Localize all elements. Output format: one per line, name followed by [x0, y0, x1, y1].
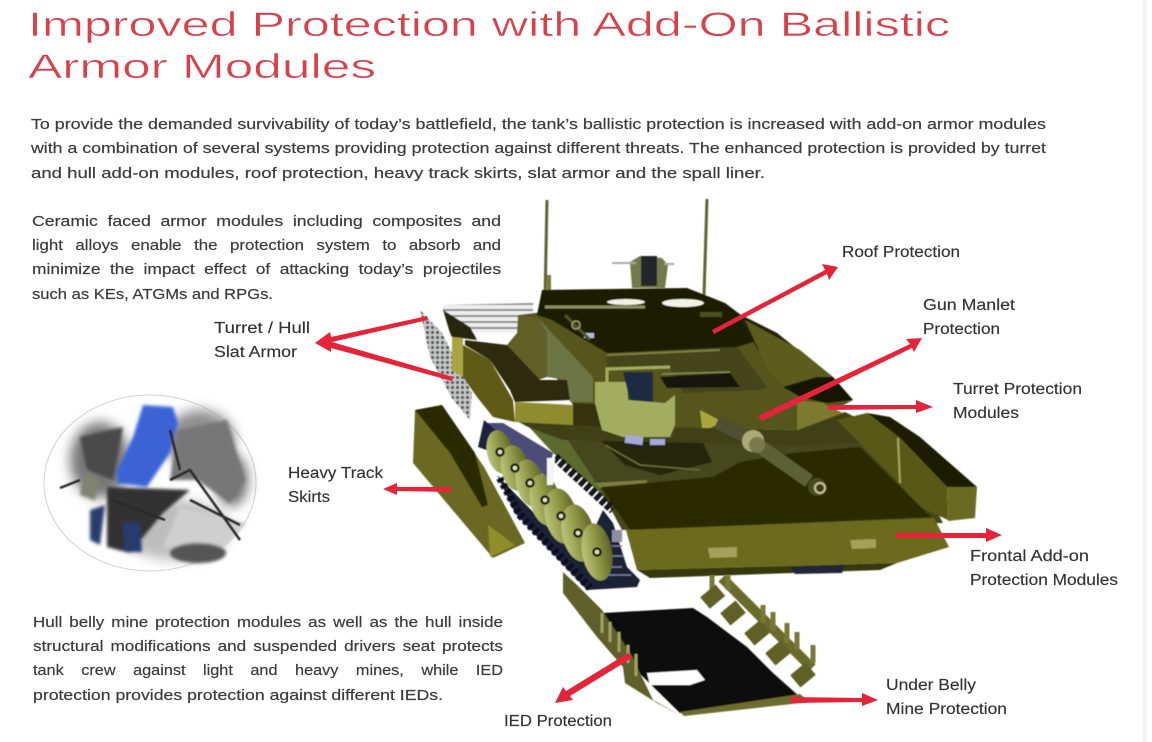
intro paragraph: with a combination of several systems providing protection against different threats. The enhanced protection is provided by turret — [30, 140, 1047, 157]
arrow: frontal add-on — [896, 528, 1002, 542]
lower track — [497, 475, 640, 590]
ceramic armor paragraph — [32, 213, 501, 303]
arrow: slat armor — [315, 316, 453, 381]
hull flank — [530, 428, 612, 505]
intro paragraph — [30, 116, 1047, 182]
antennas — [545, 199, 707, 300]
arrow: turret protection modules — [828, 400, 933, 413]
title — [28, 6, 950, 86]
intro paragraph: and hull add-on modules, roof protection, heavy track skirts, slat armor and the spall liner. — [31, 165, 765, 182]
ceramic armor paragraph: minimize the impact effect of attacking today’s projectiles — [32, 261, 501, 278]
turret front plate — [678, 390, 775, 425]
hull belly paragraph: tank crew against light and heavy mines, while IED — [33, 662, 503, 679]
gun barrel — [717, 422, 826, 496]
turret-hull junction — [515, 412, 900, 445]
periscopes — [625, 435, 665, 445]
title: Improved Protection with Add-On Ballistic — [28, 6, 950, 44]
label: frontal add-on protection modules: Frontal Add-on — [970, 548, 1089, 565]
arrow: under belly — [790, 693, 878, 706]
right hull side — [837, 413, 948, 520]
glacis plate — [601, 447, 933, 530]
label: turret hull slat armor: Slat Armor — [214, 344, 297, 361]
label: IED protection: IED Protection — [504, 713, 612, 730]
arrow: heavy track skirts — [383, 483, 451, 495]
right turret module — [737, 313, 853, 430]
label: under belly mine protection — [886, 677, 1007, 718]
commander sight — [612, 256, 674, 288]
label: under belly mine protection: Mine Protection — [886, 701, 1007, 718]
turret top recess — [607, 347, 767, 393]
label: gun manlet protection: Gun Manlet — [923, 297, 1016, 314]
hull belly paragraph: protection provides protection against different IEDs. — [33, 687, 443, 704]
rear turret detail — [507, 315, 547, 380]
arrow: gun mantlet — [758, 338, 922, 421]
hull belly paragraph — [33, 614, 503, 704]
label: frontal add-on protection modules — [970, 548, 1118, 589]
label: turret protection modules: Modules — [953, 405, 1019, 422]
window — [623, 372, 653, 402]
label: gun manlet protection — [923, 297, 1016, 338]
front plate — [626, 518, 949, 570]
title: Armor Modules — [28, 48, 376, 86]
intro paragraph: To provide the demanded survivability of today’s battlefield, the tank’s ballistic protection is increased with add-on armor modules — [31, 116, 1046, 133]
label: turret protection modules: Turret Protection — [953, 381, 1082, 398]
turret side armor — [538, 318, 593, 402]
label: turret hull slat armor: Turret / Hull — [214, 320, 310, 337]
roof detail — [545, 299, 722, 340]
label: turret protection modules — [953, 381, 1082, 422]
ceramic armor paragraph: Ceramic faced armor modules including composites and — [32, 213, 501, 230]
turret base — [518, 310, 853, 430]
right rail — [700, 575, 816, 688]
arrow: roof protection — [712, 264, 838, 334]
hull belly paragraph: Hull belly mine protection modules as well as the hull inside — [33, 614, 503, 631]
turret top dark bands — [660, 373, 763, 402]
label: roof protection: Roof Protection — [842, 244, 960, 261]
roof plate — [537, 288, 760, 353]
label: frontal add-on protection modules: Protection Modules — [970, 572, 1118, 589]
label: under belly mine protection: Under Belly — [886, 677, 976, 694]
left turret module — [443, 310, 618, 427]
left rail — [563, 572, 680, 715]
ceramic armor paragraph: such as KEs, ATGMs and RPGs. — [32, 286, 273, 303]
label: heavy track skirts: Heavy Track — [288, 465, 383, 482]
yellow gun wedge — [700, 410, 723, 428]
center light block — [595, 382, 675, 437]
label: turret hull slat armor — [214, 320, 310, 361]
wheel hubs — [496, 448, 600, 556]
window frame — [607, 367, 670, 382]
hull belly paragraph: structural modifications and suspended drivers seat protects — [33, 638, 503, 655]
skirt shadow and upper track — [478, 420, 613, 510]
hull deck — [563, 433, 943, 530]
plate cutout — [647, 670, 705, 685]
black belly plate — [603, 608, 800, 713]
arrow: IED protection — [555, 653, 632, 703]
ceramic armor paragraph: light alloys enable the protection system to absorb and — [32, 237, 501, 254]
right edge band — [1143, 0, 1147, 742]
label: gun manlet protection: Protection — [923, 321, 1000, 338]
belly and IED protection plates — [563, 572, 816, 716]
label: heavy track skirts: Skirts — [288, 489, 330, 506]
tank illustration — [413, 199, 977, 590]
photo: suspended driver seat — [44, 395, 256, 571]
rear slat armor — [420, 303, 533, 420]
label: heavy track skirts — [288, 465, 383, 506]
white track tab — [547, 458, 555, 485]
road wheels — [483, 428, 617, 583]
bottom lip — [680, 694, 810, 716]
heavy track skirt — [413, 405, 525, 558]
